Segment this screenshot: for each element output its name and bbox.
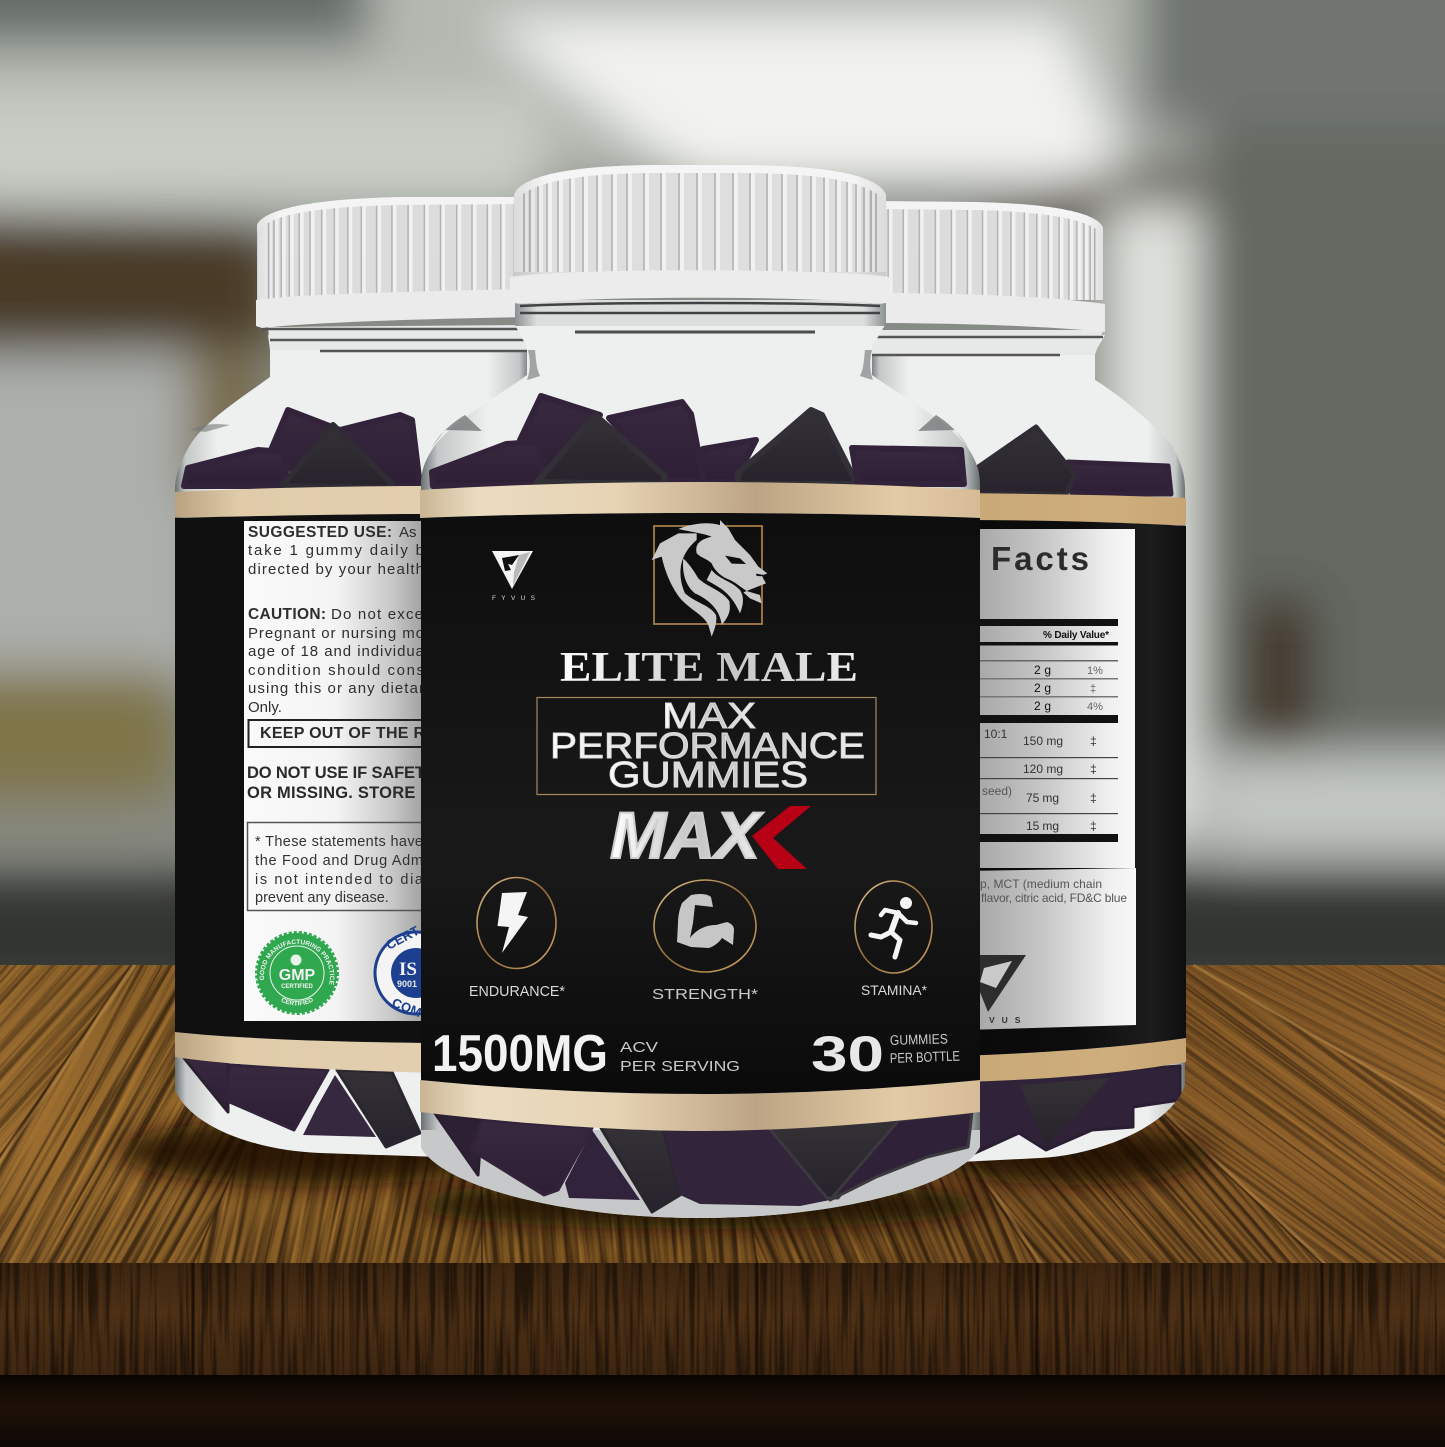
facts table: 1% — [1087, 665, 1103, 677]
benefit: stamina — [855, 881, 932, 998]
caution: Pregnant or nursing mo — [248, 625, 424, 642]
right bottle tan bands — [960, 493, 1186, 525]
ISO seal: 9001 — [397, 979, 417, 989]
facts table: 2 g — [1034, 681, 1051, 695]
benefit: endurance — [469, 878, 565, 1000]
ingredients text: flavor, citric acid, FD&C blue — [981, 891, 1127, 905]
GMP seal — [255, 931, 339, 1015]
disclaimer box: * These statements have — [255, 834, 423, 850]
right bottle glass — [870, 330, 1185, 1162]
caution: Only. — [248, 699, 282, 716]
facts table: seed) — [982, 784, 1012, 798]
facts table: 120 mg — [1023, 762, 1063, 776]
benefit: strength: STRENGTH* — [652, 986, 758, 1003]
ISO seal: COM — [390, 995, 424, 1020]
facts table: 2 g — [1034, 699, 1051, 713]
GMP seal: GMP — [279, 967, 316, 984]
GMP seal: GOOD MANUFACTURING PRACTICE — [260, 939, 334, 985]
suggested use: As — [399, 524, 417, 541]
suggested use — [248, 524, 424, 578]
caution: age of 18 and individua — [248, 643, 425, 660]
ISO seal: CERT — [383, 923, 422, 953]
left bottle cap — [256, 197, 515, 328]
disclaimer box: the Food and Drug Adm — [255, 853, 423, 869]
facts table: 10:1 — [984, 727, 1008, 741]
wooden table — [0, 965, 1445, 1447]
GMP seal: CERTIFIED — [281, 984, 313, 990]
stat: 30 gummies per bottle: 30 — [811, 1026, 884, 1082]
suggested use: directed by your health — [248, 561, 424, 578]
facts table: 4% — [1087, 701, 1103, 713]
stat: 30 gummies per bottle — [811, 1026, 960, 1082]
panel: directions text — [244, 521, 425, 1021]
safety warning — [247, 764, 425, 802]
facts table: ‡ — [1090, 791, 1097, 805]
suggested use: SUGGESTED USE: — [248, 524, 392, 541]
left bottle glass — [175, 325, 530, 1157]
center label tan band top — [420, 482, 980, 518]
keep out box: KEEP OUT OF THE R — [260, 725, 425, 742]
safety warning: DO NOT USE IF SAFET — [247, 764, 425, 782]
FYVUS logo — [492, 551, 536, 602]
facts table: ‡ — [1090, 734, 1097, 748]
icon: running figure — [871, 897, 916, 957]
center bottle cap — [510, 160, 890, 304]
facts table: 150 mg — [1023, 734, 1063, 748]
blurred room background — [0, 0, 1445, 1002]
suggested use: take 1 gummy daily b — [248, 542, 424, 559]
left bottle gummies top — [184, 410, 420, 488]
panel: supplement facts — [965, 529, 1136, 1030]
center bottle glass — [421, 300, 980, 1218]
facts table — [965, 619, 1118, 842]
facts table: ‡ — [1090, 683, 1096, 695]
stat: 1500mg acv per serving: 1500MG — [432, 1025, 608, 1083]
disclaimer box: prevent any disease. — [255, 890, 389, 906]
left bottle black label — [175, 514, 430, 1043]
stat: 30 gummies per bottle: PER BOTTLE — [890, 1048, 960, 1066]
caution — [248, 606, 425, 716]
facts table: ‡ — [1090, 762, 1097, 776]
ISO seal — [375, 923, 457, 1020]
facts table: 75 mg — [1026, 791, 1059, 805]
facts table: 15 mg — [1026, 819, 1059, 833]
facts table: ‡ — [1090, 819, 1097, 833]
disclaimer box — [248, 822, 438, 910]
center bottle — [420, 160, 980, 1218]
FYVUS logo dark — [965, 955, 1027, 1025]
ingredients text — [980, 877, 1127, 905]
left bottle: back label — [175, 197, 527, 1157]
caution: condition should cons — [248, 662, 424, 679]
FYVUS logo dark: VUS — [989, 1015, 1027, 1025]
right bottle gummies bottom — [975, 1066, 1180, 1153]
benefit: stamina: STAMINA* — [861, 982, 928, 998]
caution: Do not exce — [331, 606, 423, 623]
icon: flexed bicep — [677, 894, 734, 948]
stat: 1500mg acv per serving: ACV — [620, 1039, 658, 1056]
title: elite male: ELITE MALE — [560, 645, 858, 691]
left bottle tan bands — [175, 486, 430, 517]
lion logo — [652, 520, 767, 637]
center label tan band bottom — [420, 1080, 980, 1131]
MAX logo: MAX — [610, 798, 764, 872]
right bottle gummies top — [974, 427, 1171, 494]
FYVUS logo: FYVUS — [492, 595, 536, 602]
stat: 30 gummies per bottle: GUMMIES — [890, 1030, 948, 1048]
disclaimer box: is not intended to dia — [255, 872, 424, 888]
ingredients text: p, MCT (medium chain — [980, 877, 1102, 891]
icon: lightning bolt — [498, 892, 528, 953]
left bottle gummies bottom — [184, 1058, 420, 1147]
ISO seal: IS — [399, 959, 417, 980]
right bottle cap — [886, 201, 1105, 332]
center label black body — [421, 513, 980, 1094]
caution: CAUTION: — [248, 606, 326, 623]
product name box: MAX — [662, 695, 756, 736]
center bottle gummies top — [432, 396, 964, 486]
facts table: % Daily Value* — [1043, 630, 1109, 641]
safety warning: OR MISSING. STORE I — [247, 784, 425, 802]
stat: 1500mg acv per serving — [432, 1025, 740, 1083]
center bottle gummies bottom — [434, 1112, 972, 1212]
keep out box — [248, 720, 438, 747]
gold square frame — [654, 526, 762, 624]
right bottle: nutrition label — [872, 201, 1186, 1162]
benefit: endurance: ENDURANCE* — [469, 984, 565, 1000]
product name box — [537, 695, 876, 795]
benefit: strength — [652, 880, 758, 1003]
product name box: GUMMIES — [608, 754, 808, 795]
caution: using this or any dietar — [248, 680, 424, 697]
facts table: 2 g — [1034, 663, 1051, 677]
GMP seal: CERTIFIED — [282, 998, 313, 1006]
bottle shadows on table — [120, 1118, 1210, 1229]
facts heading: Facts — [991, 540, 1089, 577]
product name box: PERFORMANCE — [550, 725, 865, 766]
right bottle black label — [960, 520, 1186, 1056]
stat: 1500mg acv per serving: PER SERVING — [620, 1058, 740, 1075]
